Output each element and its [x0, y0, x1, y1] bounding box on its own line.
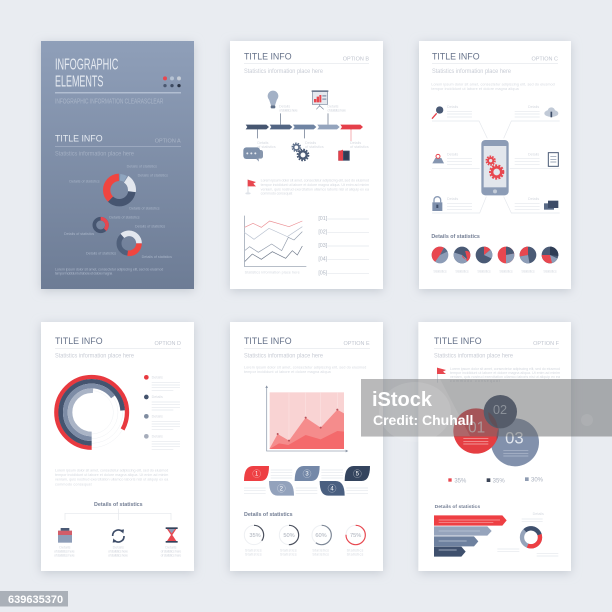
donut chart medium [119, 233, 139, 253]
legend: Details [152, 375, 163, 379]
pie labels: Statistics [477, 270, 491, 274]
gauge captions: Statistics [347, 549, 364, 553]
title: TITLE INFO [244, 51, 292, 61]
pie labels: Statistics [543, 270, 557, 274]
panel: option D [41, 322, 194, 571]
percentages: 35% [454, 478, 467, 484]
chart labels [64, 165, 172, 259]
pie labels [433, 270, 557, 274]
icon: clipboard [548, 153, 558, 166]
list rows: [02] [318, 230, 328, 236]
icon: gears [292, 143, 308, 160]
icon: map pin [432, 154, 444, 163]
numbered leaf steps: 2 [280, 486, 284, 492]
chart labels: Details of statistics [135, 224, 165, 228]
body text: tempor incididunt ut labore et dolore magna aliqua. Ut enim ad minim [450, 371, 560, 375]
body text: veniam, quis nostrud exercitation ullamco laboris nisi ut aliquip ex ea [55, 478, 169, 482]
callout labels: Details [447, 152, 458, 156]
donut labels: Details [533, 512, 544, 516]
list rows: [04] [318, 256, 328, 262]
chart labels: Details of statistics [129, 206, 160, 210]
icon: briefcase [58, 528, 72, 543]
gauge captions: Statistics [312, 549, 329, 553]
intro text [244, 365, 366, 374]
timeline labels: Details [327, 104, 339, 108]
heading: infographic elements: ELEMENTS [55, 74, 103, 91]
chart labels: Details of statistics [127, 165, 157, 169]
icon: red and dark box [338, 150, 350, 161]
gauge captions: Statistics [312, 553, 329, 557]
statistics line: Statistics information place here [432, 68, 511, 75]
body text: Lorem ipsum dolor sit amet, consectetur adipiscing elit, sed do eiusmod [55, 268, 163, 272]
heading: infographic elements [55, 56, 118, 91]
body text [55, 468, 169, 486]
title: TITLE INFO [434, 336, 482, 346]
venn circles: 03 [505, 429, 524, 448]
venn circles: 01 [468, 419, 485, 436]
callout labels: Details [528, 105, 539, 109]
percentages: 35% [493, 478, 505, 484]
pie labels: Statistics [521, 270, 535, 274]
venn circles: 02 [493, 403, 507, 417]
leaf captions [244, 470, 368, 493]
gauge values: 60% [315, 533, 327, 539]
callout labels: Details [528, 197, 539, 201]
gauge values: 35% [249, 533, 261, 539]
timeline labels: of statistics here [279, 108, 298, 112]
icon captions: of statistics here [161, 554, 181, 558]
option label: OPTION C [531, 57, 558, 63]
icon: flag [437, 368, 446, 383]
donut chart small [94, 219, 107, 231]
pie labels: Statistics [455, 270, 469, 274]
line chart [245, 216, 306, 267]
donut chart [522, 528, 540, 546]
icon: cloud [544, 107, 558, 117]
panel: option B [230, 41, 383, 289]
statistics line: Statistics information place here [55, 353, 134, 360]
icon captions: of statistics here [108, 550, 128, 554]
intro text [431, 82, 555, 91]
donut labels [497, 512, 558, 556]
statistics line: Statistics information place here [55, 150, 134, 157]
watermark text: Credit: Chuhall [373, 412, 473, 428]
gauge captions: Statistics [245, 549, 262, 553]
icon captions: of statistics here [54, 550, 75, 554]
option label: OPTION D [154, 341, 181, 347]
watermark band [361, 379, 612, 442]
icon: smartphone with gears [481, 140, 509, 195]
icon: speech bubbles [243, 147, 263, 162]
callout labels: Details [447, 197, 458, 201]
numbered leaf steps: 3 [305, 472, 309, 478]
venn circles [453, 395, 539, 466]
icon: refresh [113, 529, 124, 543]
callout labels [447, 105, 540, 209]
image id tag: 639635370 [8, 594, 63, 606]
watermark text [372, 389, 473, 428]
gauge captions: Statistics [280, 549, 297, 553]
body text: veniam, quis nostrud exercitation ullamco laboris nisi ut aliquip ex ea [261, 187, 370, 191]
heading: details: Details of statistics [94, 502, 143, 508]
numbered leaf steps: 1 [255, 472, 259, 478]
icon captions [54, 546, 181, 558]
numbered leaf steps [244, 466, 370, 496]
list rows: [05] [318, 270, 328, 276]
chart labels: Details of statistics [142, 255, 172, 259]
numbered leaf steps: 5 [356, 472, 360, 478]
timeline labels: Details [350, 141, 361, 145]
icon: light bulb [268, 91, 278, 108]
timeline labels: of statistics [350, 145, 369, 149]
body text: commodo consequat [55, 482, 92, 486]
gauge charts [244, 525, 365, 545]
heading: details: Details of statistics [435, 504, 480, 510]
body text [261, 179, 370, 196]
list rows [318, 216, 369, 276]
title: TITLE INFO [55, 134, 103, 144]
option label: OPTION F [533, 341, 560, 347]
icon captions: Details [113, 546, 124, 550]
icon: presentation board [312, 90, 328, 109]
timeline labels: Details [305, 141, 316, 145]
icon: card [544, 201, 558, 210]
icon captions: of statistics here [54, 554, 75, 558]
body text [450, 367, 561, 383]
connector lines [432, 121, 560, 213]
timeline labels: of statistics [305, 145, 324, 149]
icon captions: of statistics here [108, 554, 128, 558]
timeline labels [257, 104, 369, 149]
icon captions: Details [165, 546, 177, 550]
gauge captions: Statistics [245, 553, 262, 557]
timeline labels: Details [257, 141, 269, 145]
radial bar chart [56, 377, 127, 448]
heading: details: Details of statistics [431, 234, 480, 240]
pie charts row [432, 247, 558, 263]
statistics line: Statistics information place here [244, 353, 323, 360]
chart labels: Details of statistics [69, 180, 100, 184]
option label: OPTION A [155, 138, 181, 144]
option label: OPTION B [343, 57, 369, 63]
pie labels: Statistics [499, 270, 513, 274]
intro text: tempor incididunt ut labore et dolore magna aliqua [431, 87, 520, 91]
title: TITLE INFO [432, 51, 480, 61]
icon captions: of statistics here [161, 550, 181, 554]
body text: tempor incididunt ut labore et dolore magna [55, 272, 113, 276]
list rows: [03] [318, 243, 328, 249]
statistics line: Statistics information place here [244, 68, 323, 75]
image id tag [0, 591, 68, 606]
area chart [265, 385, 348, 452]
chart labels: Details of statistics [138, 174, 168, 178]
intro text: Lorem ipsum dolor sit amet, consectetur adipiscing elit, sed do eiusmod [244, 365, 366, 369]
icon: flag [245, 179, 256, 194]
icon: hourglass [166, 527, 178, 543]
panel: option A cover [41, 41, 194, 289]
gauge captions: Statistics [347, 553, 364, 557]
title: TITLE INFO [244, 336, 292, 346]
chart labels: Details of statistics [109, 215, 140, 219]
icon: magnifier [432, 106, 443, 119]
subtitle: INFOGRAPHIC INFORMATION CLEARASCLEAR [55, 99, 163, 106]
list rows: [01] [318, 216, 328, 222]
panel: option C [419, 41, 571, 289]
gauge captions [245, 549, 364, 557]
timeline arrows [246, 113, 363, 141]
numbered leaf steps: 4 [330, 486, 334, 492]
heading: details: Details of statistics [244, 512, 293, 518]
gauge values [249, 533, 361, 539]
body text: Lorem ipsum dolor sit amet, consectetur adipiscing elit, sed do eiusmod [55, 468, 168, 472]
body text [55, 268, 163, 276]
callout labels: Details [447, 105, 458, 109]
body text: Lorem ipsum dolor sit amet, consectetur adipiscing elit, sed do eiusmod [450, 367, 560, 371]
gauge captions: Statistics [280, 553, 297, 557]
icon: lock [432, 197, 442, 211]
callout labels: Details [528, 152, 539, 156]
watermark text: iStock [372, 389, 433, 411]
icon: colour dots [163, 76, 181, 87]
timeline labels: Details [279, 104, 290, 108]
gauge values: 50% [283, 533, 295, 539]
body text: Lorem ipsum dolor sit amet, consectetur adipiscing elit, sed do eiusmod [261, 179, 369, 183]
legend: Details [152, 434, 163, 438]
legend [144, 375, 180, 449]
statistics line: Statistics information place here [434, 353, 513, 360]
body text: commodo consequat [450, 379, 500, 383]
percentages: 30% [531, 477, 544, 483]
option label: OPTION E [343, 341, 370, 347]
arrow bars [434, 515, 507, 557]
intro text: Lorem ipsum dolor sit amet, consectetur adipiscing elit, sed do eiusmod [431, 82, 555, 86]
body text: tempor incididunt ut labore et dolore magna aliqua. Ut enim ad minim [261, 183, 369, 187]
legend: Details [152, 395, 163, 399]
donut chart large [107, 177, 132, 203]
body text: commodo consequat [261, 192, 292, 196]
chart labels: Details of statistics [86, 251, 116, 255]
percentages [448, 477, 544, 484]
heading: infographic elements: INFOGRAPHIC [55, 56, 118, 73]
timeline labels: of statistics here [327, 108, 346, 112]
chart caption: Statistics information place here [245, 271, 300, 275]
body text: veniam, quis nostrud exercitation ullamco laboris nisi ut aliquip ex ea [450, 375, 561, 379]
intro text: tempor incididunt ut labore et dolore magna aliqua [244, 370, 332, 374]
icon captions: Details [59, 546, 71, 550]
title: TITLE INFO [55, 336, 103, 346]
gauge values: 75% [350, 533, 361, 539]
panel: option F [418, 322, 571, 571]
pie labels: Statistics [433, 270, 447, 274]
body text: tempor incididunt ut labore et dolore magna aliqua. Ut enim ad minim [55, 473, 168, 477]
panel: option E [230, 322, 383, 571]
legend: Details [152, 414, 163, 418]
chart labels: Details of statistics [64, 232, 94, 236]
timeline labels: of statistics [257, 145, 276, 149]
